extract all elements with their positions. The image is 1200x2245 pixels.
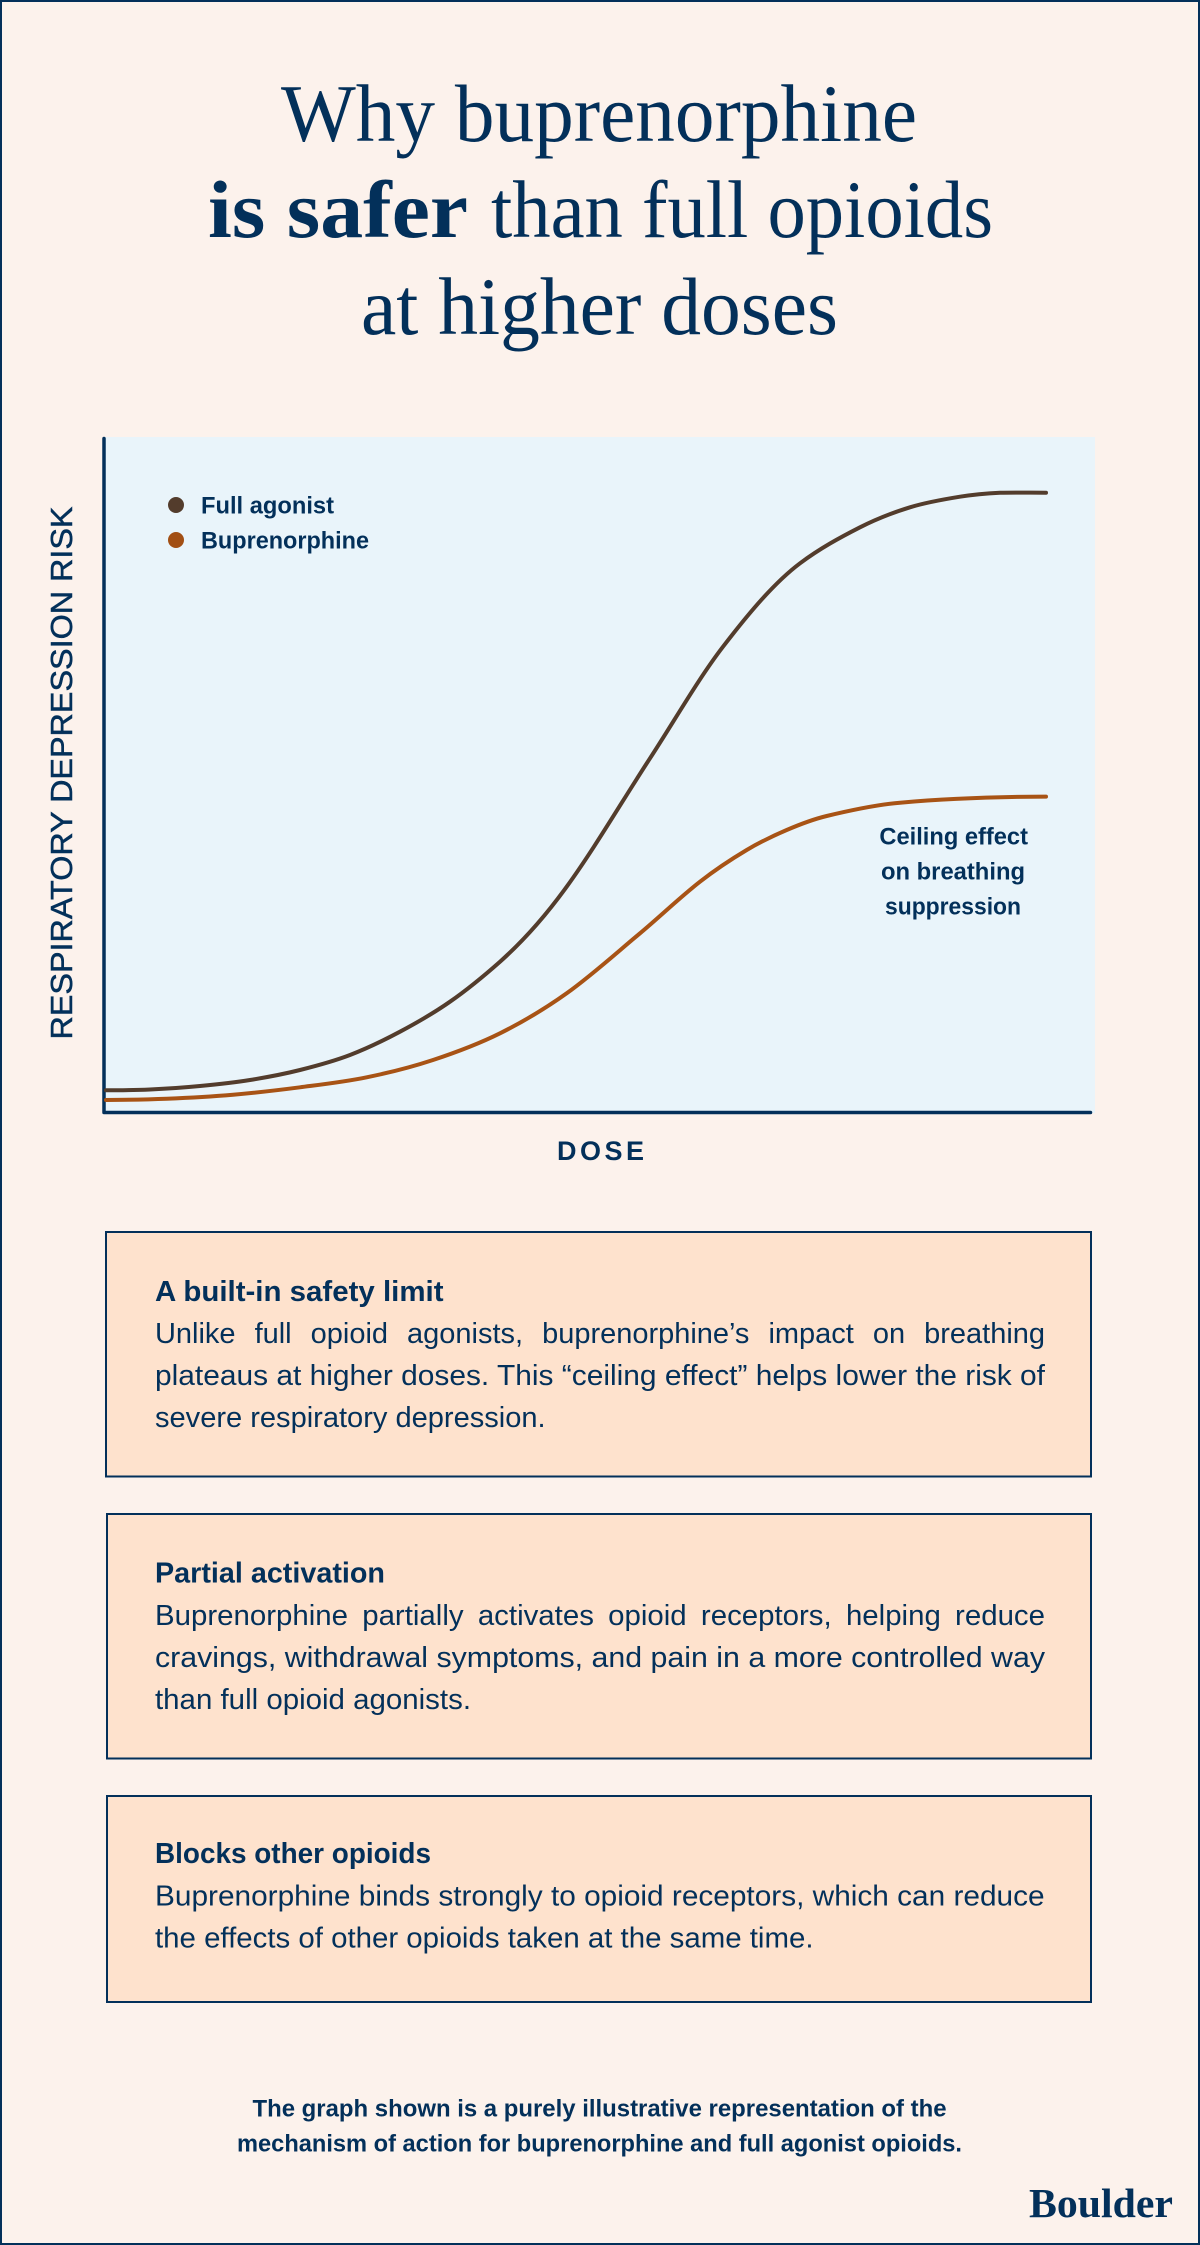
panel body text: [155, 1318, 1046, 1434]
footnote: mechanism of action for buprenorphine and full agonist opioids.: [237, 2131, 962, 2158]
logo: Boulder: Boulder: [1029, 2180, 1173, 2226]
title: is safer: [208, 164, 468, 255]
panel heading: Blocks other opioids: [155, 1838, 431, 1870]
panel: blocks other opioids: [107, 1796, 1091, 2002]
panel heading: A built-in safety limit: [155, 1276, 444, 1308]
panel body text: severe respiratory depression.: [155, 1402, 546, 1434]
title: [208, 68, 993, 352]
panel body text: than full opioid agonists.: [155, 1684, 471, 1716]
panel heading: Partial activation: [155, 1558, 385, 1590]
footnote: [237, 2096, 962, 2158]
legend: [168, 492, 369, 554]
annotation: ceiling effect: suppression: [885, 893, 1021, 920]
annotation: ceiling effect: Ceiling effect: [879, 824, 1028, 851]
title: than full opioids: [491, 164, 993, 255]
panel body text: the effects of other opioids taken at the same time.: [155, 1923, 814, 1955]
line chart: respiratory depression risk vs dose: [44, 437, 1095, 1166]
panel: a built-in safety limit: [106, 1232, 1091, 1476]
panel body text: cravings, withdrawal symptoms, and pain in a more controlled way: [155, 1642, 1046, 1674]
panel body text: [155, 1881, 1045, 1955]
panel body text: [155, 1600, 1046, 1716]
y-axis label: RESPIRATORY DEPRESSION RISK: [44, 506, 79, 1040]
curve: full agonist: [106, 493, 1046, 1090]
legend: Full agonist: [201, 492, 334, 520]
x-axis label: DOSE: [557, 1136, 644, 1166]
annotation: ceiling effect: on breathing: [881, 858, 1025, 886]
annotation: ceiling effect: [879, 824, 1028, 920]
panel body text: Buprenorphine binds strongly to opioid receptors, which can reduce: [155, 1881, 1045, 1913]
panel body text: Unlike full opioid agonists, buprenorphine’s impact on breathing: [155, 1318, 1045, 1350]
footnote: The graph shown is a purely illustrative representation of the: [252, 2096, 946, 2123]
axes: [104, 438, 1090, 1112]
panel: partial activation: [107, 1514, 1091, 1758]
title: at higher doses: [361, 261, 838, 352]
title: Why buprenorphine: [281, 68, 917, 159]
panel body text: Buprenorphine partially activates opioid receptors, helping reduce: [155, 1600, 1045, 1632]
panel body text: plateaus at higher doses. This “ceiling effect” helps lower the risk of: [155, 1360, 1046, 1392]
legend: Buprenorphine: [201, 528, 369, 554]
curve: buprenorphine: [106, 797, 1046, 1100]
